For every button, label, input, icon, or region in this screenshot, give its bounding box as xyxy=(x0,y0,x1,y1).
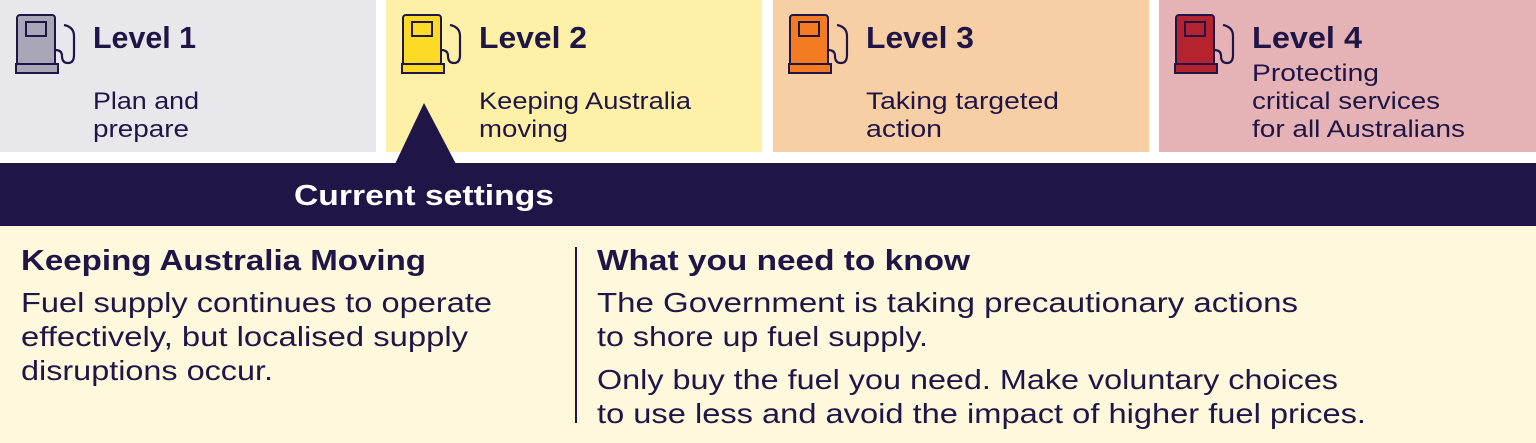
text block: what you need to know xyxy=(597,245,1366,429)
current settings band: Current settings xyxy=(294,180,554,212)
text block: what you need to know: to shore up fuel supply. xyxy=(597,321,928,352)
panel: level 1: prepare xyxy=(93,116,189,143)
text block: what you need to know: What you need to know xyxy=(597,245,970,277)
panel: level 2: Level 2 xyxy=(479,20,587,55)
text block: what you need to know: The Government is taking precautionary actions xyxy=(597,287,1298,318)
icon: fuel pump orange xyxy=(789,15,847,73)
text block: keeping australia moving: effectively, but localised supply xyxy=(21,321,468,352)
panel: details xyxy=(0,226,1536,443)
current settings band xyxy=(0,103,1536,226)
icon: fuel pump grey xyxy=(16,15,74,73)
text block: what you need to know: Only buy the fuel you need. Make voluntary choices xyxy=(597,364,1338,395)
panel: level 1: Plan and xyxy=(93,88,199,115)
panel: level 3 xyxy=(773,0,1149,152)
panel: level 4: Protecting xyxy=(1252,60,1379,87)
panel: level 2: Keeping Australia xyxy=(479,88,692,115)
panel: level 1 xyxy=(0,0,376,152)
panel: level 4 xyxy=(1159,0,1536,152)
panel: level 3: Taking targeted xyxy=(866,88,1059,115)
panel: level 3: Level 3 xyxy=(866,20,974,55)
panel: level 1: Level 1 xyxy=(93,20,196,55)
text block: keeping australia moving: disruptions occur. xyxy=(21,355,273,386)
panel: level 2 xyxy=(386,0,762,152)
arrow: pointer to level 2 xyxy=(395,103,456,164)
panel: level 4: for all Australians xyxy=(1252,116,1465,143)
text block: keeping australia moving: Keeping Australia Moving xyxy=(21,245,426,277)
panel: level 4: critical services xyxy=(1252,88,1440,115)
text block: keeping australia moving xyxy=(21,245,492,386)
icon: fuel pump yellow xyxy=(402,15,460,73)
panel: level 2: moving xyxy=(479,116,568,143)
text block: keeping australia moving: Fuel supply continues to operate xyxy=(21,287,492,318)
icon: fuel pump red xyxy=(1175,15,1233,73)
panel: level 3: action xyxy=(866,116,942,143)
text block: what you need to know: to use less and avoid the impact of higher fuel prices. xyxy=(597,398,1366,429)
panel: level 4: Level 4 xyxy=(1252,20,1363,55)
